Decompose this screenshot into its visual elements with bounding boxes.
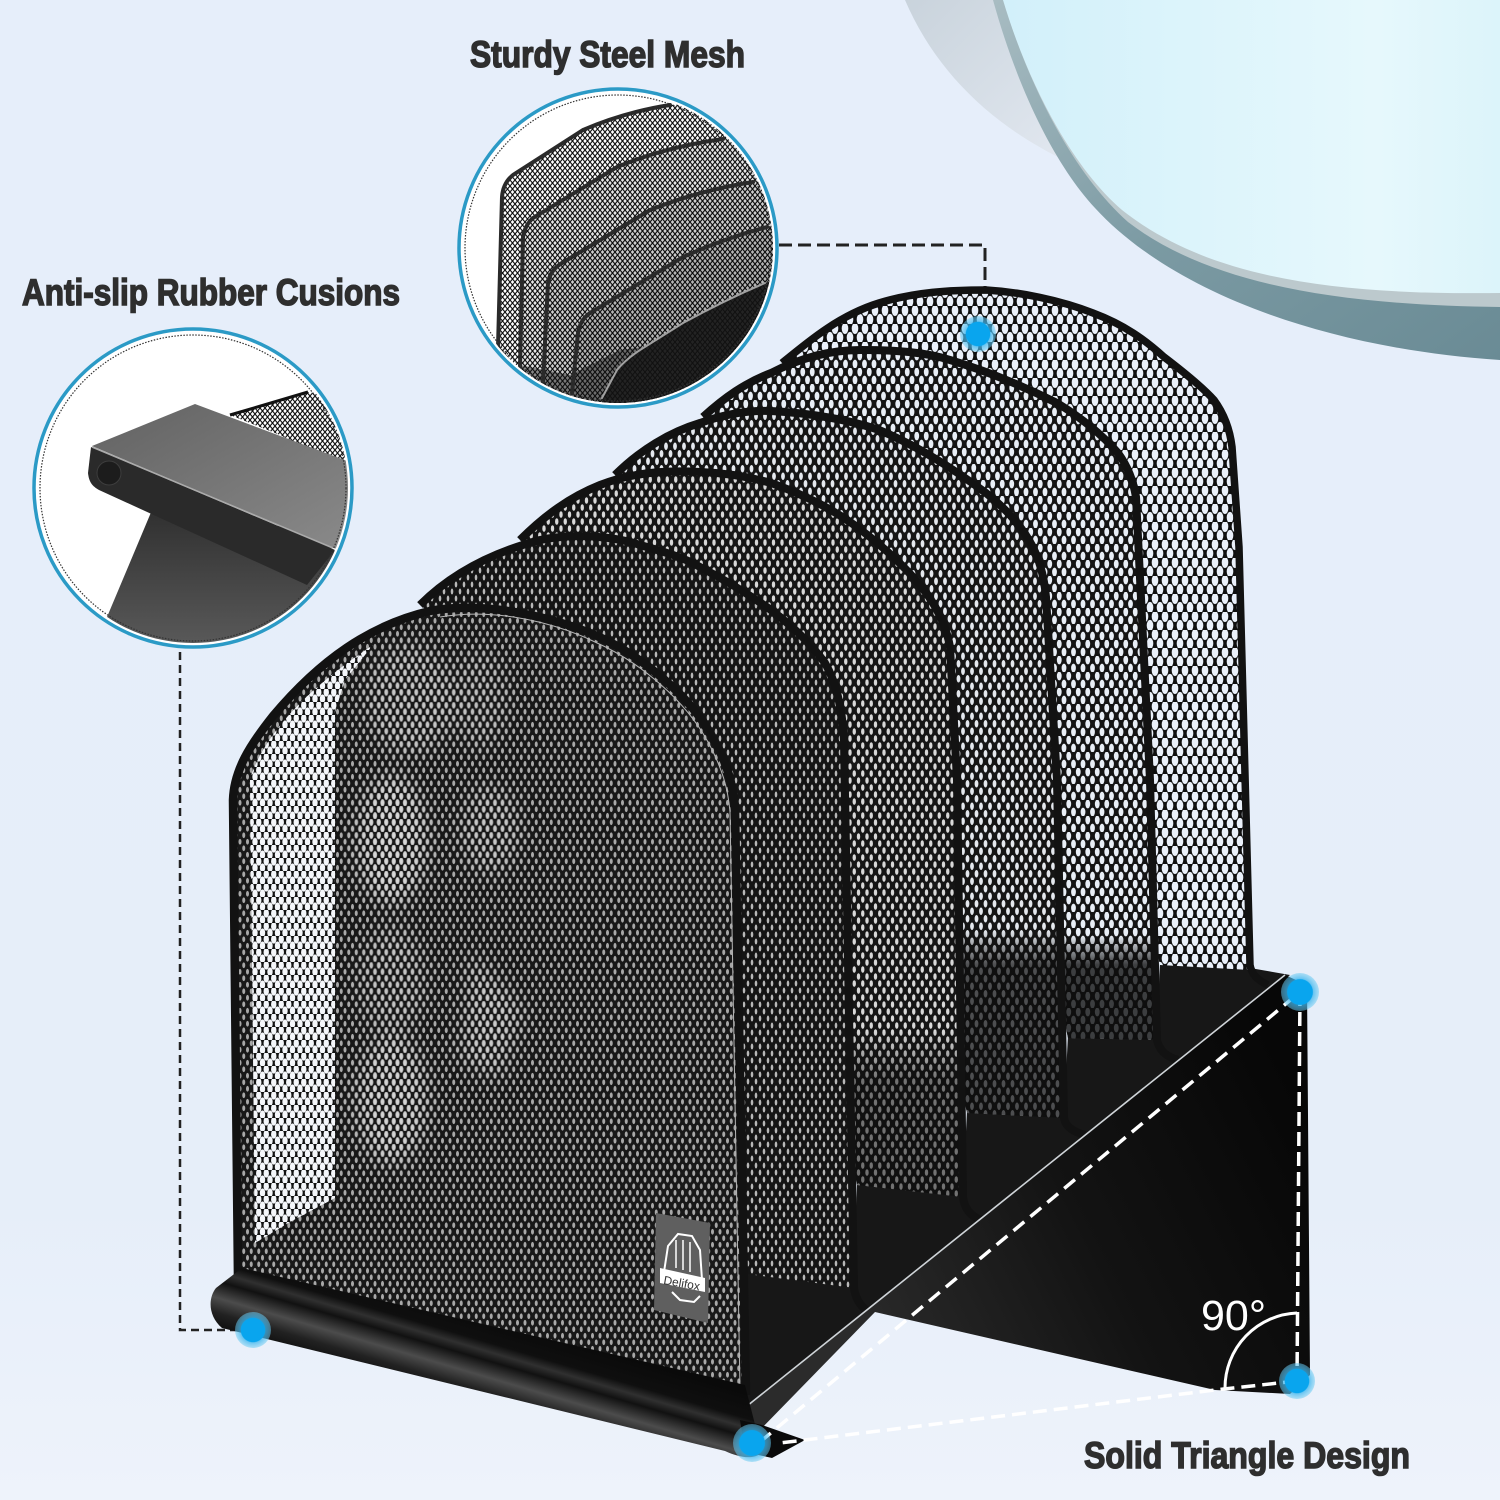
marker dot: triangle right: [1279, 1363, 1315, 1399]
mesh panel 4: [615, 411, 1085, 1135]
magnifying lens decoration: [905, 0, 1500, 360]
marker dot: cushion: [235, 1312, 271, 1348]
see-through strip: [250, 645, 373, 1243]
base floor: [745, 962, 1290, 1410]
marker dot: mesh: [960, 316, 996, 352]
side edge highlight: [742, 975, 1285, 1410]
marker dot: triangle front: [733, 1424, 771, 1462]
dashed leader: mesh callout: [779, 245, 985, 288]
callout circle: rubber cushion close-up: [34, 329, 352, 648]
front tip: [740, 1420, 805, 1458]
heading: solid triangle design: Solid Triangle Design: [1084, 1435, 1410, 1476]
rubber cushion: [97, 461, 121, 485]
mesh panel 1 (front): [233, 608, 746, 1395]
callout circle: steel mesh close-up: [457, 87, 779, 409]
bright moire patches: [343, 634, 534, 1176]
heading: sturdy steel mesh: Sturdy Steel Mesh: [470, 34, 745, 75]
angle label: 90°: [1201, 1292, 1266, 1340]
dashed leader: cushion callout: [180, 652, 240, 1330]
mesh panel 3: [520, 471, 981, 1220]
front bar: [211, 1268, 762, 1457]
white dashed triangle: [760, 992, 1300, 1443]
marker dot: triangle top: [1281, 973, 1319, 1011]
brand label: [654, 1213, 710, 1323]
triangle side wall: [742, 975, 1310, 1432]
file organizer product: [211, 290, 1310, 1458]
brand label: Delifox: [662, 1273, 701, 1293]
mesh panel 6 (back): [782, 290, 1268, 985]
heading: anti-slip rubber cushions: Anti-slip Rubber Cusions: [22, 272, 400, 313]
mesh panel 2: [420, 536, 866, 1310]
mesh panel 5: [703, 350, 1178, 1060]
